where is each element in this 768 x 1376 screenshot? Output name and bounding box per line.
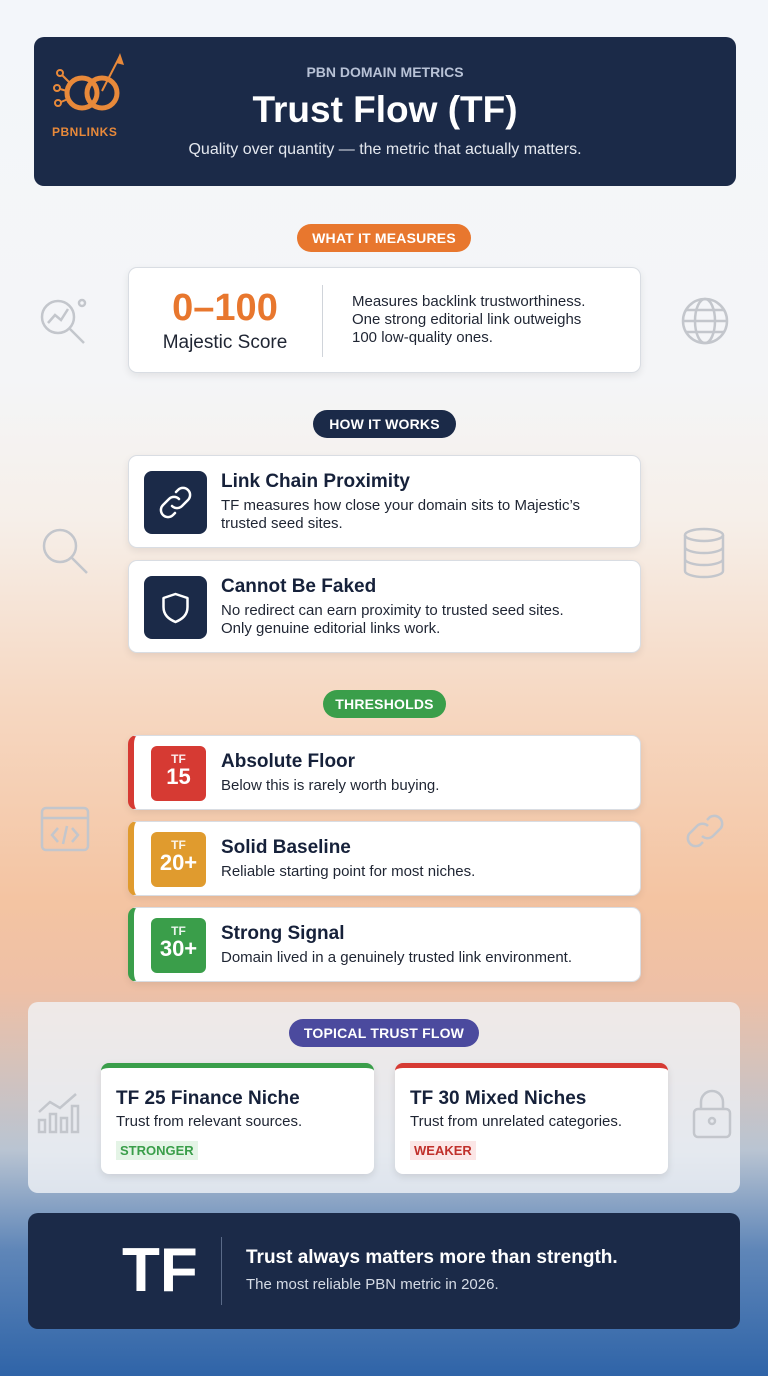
score: Majestic Score xyxy=(163,332,287,353)
threshold: 20: TF xyxy=(171,838,186,852)
description: 100 low-quality ones. xyxy=(352,329,493,346)
kicker: PBN DOMAIN METRICS xyxy=(306,64,464,80)
icon: search xyxy=(42,528,88,574)
pill: topical: TOPICAL TRUST FLOW xyxy=(304,1025,464,1041)
icon: lock xyxy=(692,1090,732,1138)
threshold: 15: Absolute Floor xyxy=(221,751,355,772)
icon: link xyxy=(686,814,724,848)
footer xyxy=(28,1213,740,1329)
threshold: 20: Reliable starting point for most niches. xyxy=(221,863,475,880)
description: Measures backlink trustworthiness. xyxy=(352,293,585,310)
card: score xyxy=(128,267,641,373)
threshold: 15 xyxy=(128,735,641,810)
icon: analytics xyxy=(40,298,86,344)
card: cannot be faked: No redirect can earn proximity to trusted seed sites. xyxy=(221,602,564,619)
score: 0–100 xyxy=(172,287,278,329)
threshold: 15: Below this is rarely worth buying. xyxy=(221,777,439,794)
pill: thresholds: THRESHOLDS xyxy=(335,696,434,712)
threshold: 20: 20+ xyxy=(160,850,197,875)
icon: database xyxy=(684,528,724,578)
threshold: 20 xyxy=(128,821,641,896)
card: finance: TF 25 Finance Niche xyxy=(116,1088,300,1109)
pill: how it works xyxy=(313,410,456,438)
pill: what it measures: WHAT IT MEASURES xyxy=(312,230,456,246)
card: link chain: TF measures how close your domain sits to Majestic’s xyxy=(221,497,580,514)
panel: topical trust flow xyxy=(28,1002,740,1193)
pill: what it measures xyxy=(297,224,471,252)
threshold: 15: TF xyxy=(171,752,186,766)
card: mixed: Trust from unrelated categories. xyxy=(410,1113,622,1130)
card: mixed xyxy=(395,1063,668,1174)
description xyxy=(352,293,585,346)
threshold: 20: Solid Baseline xyxy=(221,837,351,858)
title: Trust Flow (TF) xyxy=(252,89,518,130)
icon: globe xyxy=(682,298,728,344)
threshold: 30: TF xyxy=(171,924,186,938)
header xyxy=(34,37,736,186)
icon: link xyxy=(144,471,207,534)
icon: code window xyxy=(40,806,90,852)
logo: PBNLINKS xyxy=(52,125,117,139)
card: finance xyxy=(101,1063,374,1174)
card: cannot be faked: Only genuine editorial links work. xyxy=(221,620,440,637)
threshold: 30: 30+ xyxy=(160,936,197,961)
footer text: Trust always matters more than strength. xyxy=(246,1247,618,1268)
card: finance: Trust from relevant sources. xyxy=(116,1113,302,1130)
pill: thresholds xyxy=(323,690,446,718)
threshold: 30 xyxy=(128,907,641,982)
footer: The most reliable PBN metric in 2026. xyxy=(246,1276,499,1293)
threshold: 15: 15 xyxy=(166,764,191,789)
score xyxy=(163,287,287,353)
logo xyxy=(52,53,124,139)
card: mixed: TF 30 Mixed Niches xyxy=(410,1088,586,1109)
pill: topical xyxy=(289,1019,479,1047)
description: One strong editorial link outweighs xyxy=(352,311,581,328)
card: mixed: WEAKER xyxy=(414,1143,472,1158)
big TF: TF xyxy=(122,1236,198,1305)
threshold: 30: Strong Signal xyxy=(221,923,344,944)
card: cannot be faked: Cannot Be Faked xyxy=(221,576,376,597)
icon: chart xyxy=(38,1093,80,1134)
icon: shield xyxy=(144,576,207,639)
card: link chain: trusted seed sites. xyxy=(221,515,343,532)
pill: how it works: HOW IT WORKS xyxy=(329,416,440,432)
threshold: 30: Domain lived in a genuinely trusted link environment. xyxy=(221,949,572,966)
card: cannot be faked xyxy=(128,560,641,653)
card: finance: STRONGER xyxy=(120,1143,194,1158)
card: link chain xyxy=(128,455,641,548)
card: link chain: Link Chain Proximity xyxy=(221,471,410,492)
subtitle: Quality over quantity — the metric that actually matters. xyxy=(188,141,582,158)
